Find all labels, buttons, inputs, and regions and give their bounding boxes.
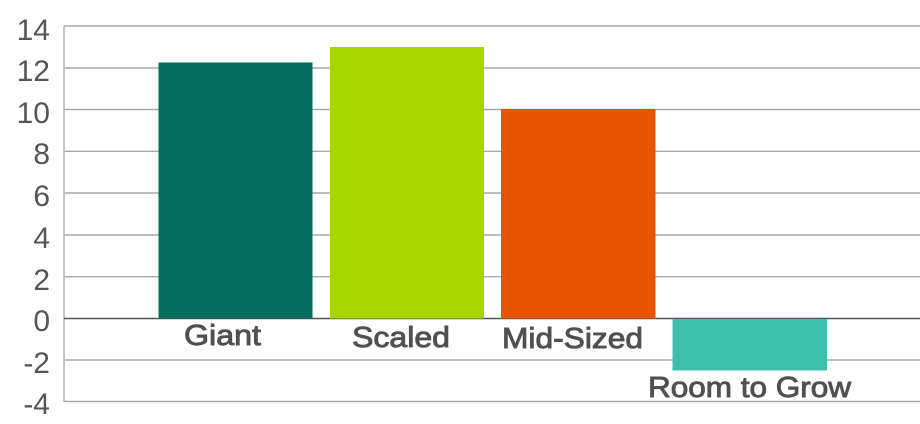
zero baseline — [64, 318, 920, 320]
y-axis labels: 8 — [33, 138, 50, 171]
y-axis labels: 6 — [33, 180, 50, 213]
bar: Giant — [158, 62, 312, 318]
y-axis labels: -4 — [23, 388, 50, 421]
y-axis labels: 10 — [17, 97, 50, 130]
category label: Room to Grow: Room to Grow — [648, 372, 852, 404]
y-axis labels: 12 — [17, 55, 50, 88]
category label: Giant: Giant — [184, 320, 261, 352]
bar: Scaled — [330, 47, 484, 318]
y-axis labels: -2 — [23, 347, 50, 380]
y-axis labels: 0 — [33, 305, 50, 338]
bar: Mid-Sized — [501, 109, 656, 318]
y-axis labels: 2 — [33, 264, 50, 297]
bar: Room to Grow — [672, 319, 827, 370]
y-axis labels: 14 — [17, 14, 50, 47]
y-axis labels: 4 — [33, 222, 50, 255]
y-axis labels — [17, 14, 50, 421]
category label: Scaled: Scaled — [352, 322, 450, 354]
category label: Mid-Sized: Mid-Sized — [502, 323, 643, 355]
